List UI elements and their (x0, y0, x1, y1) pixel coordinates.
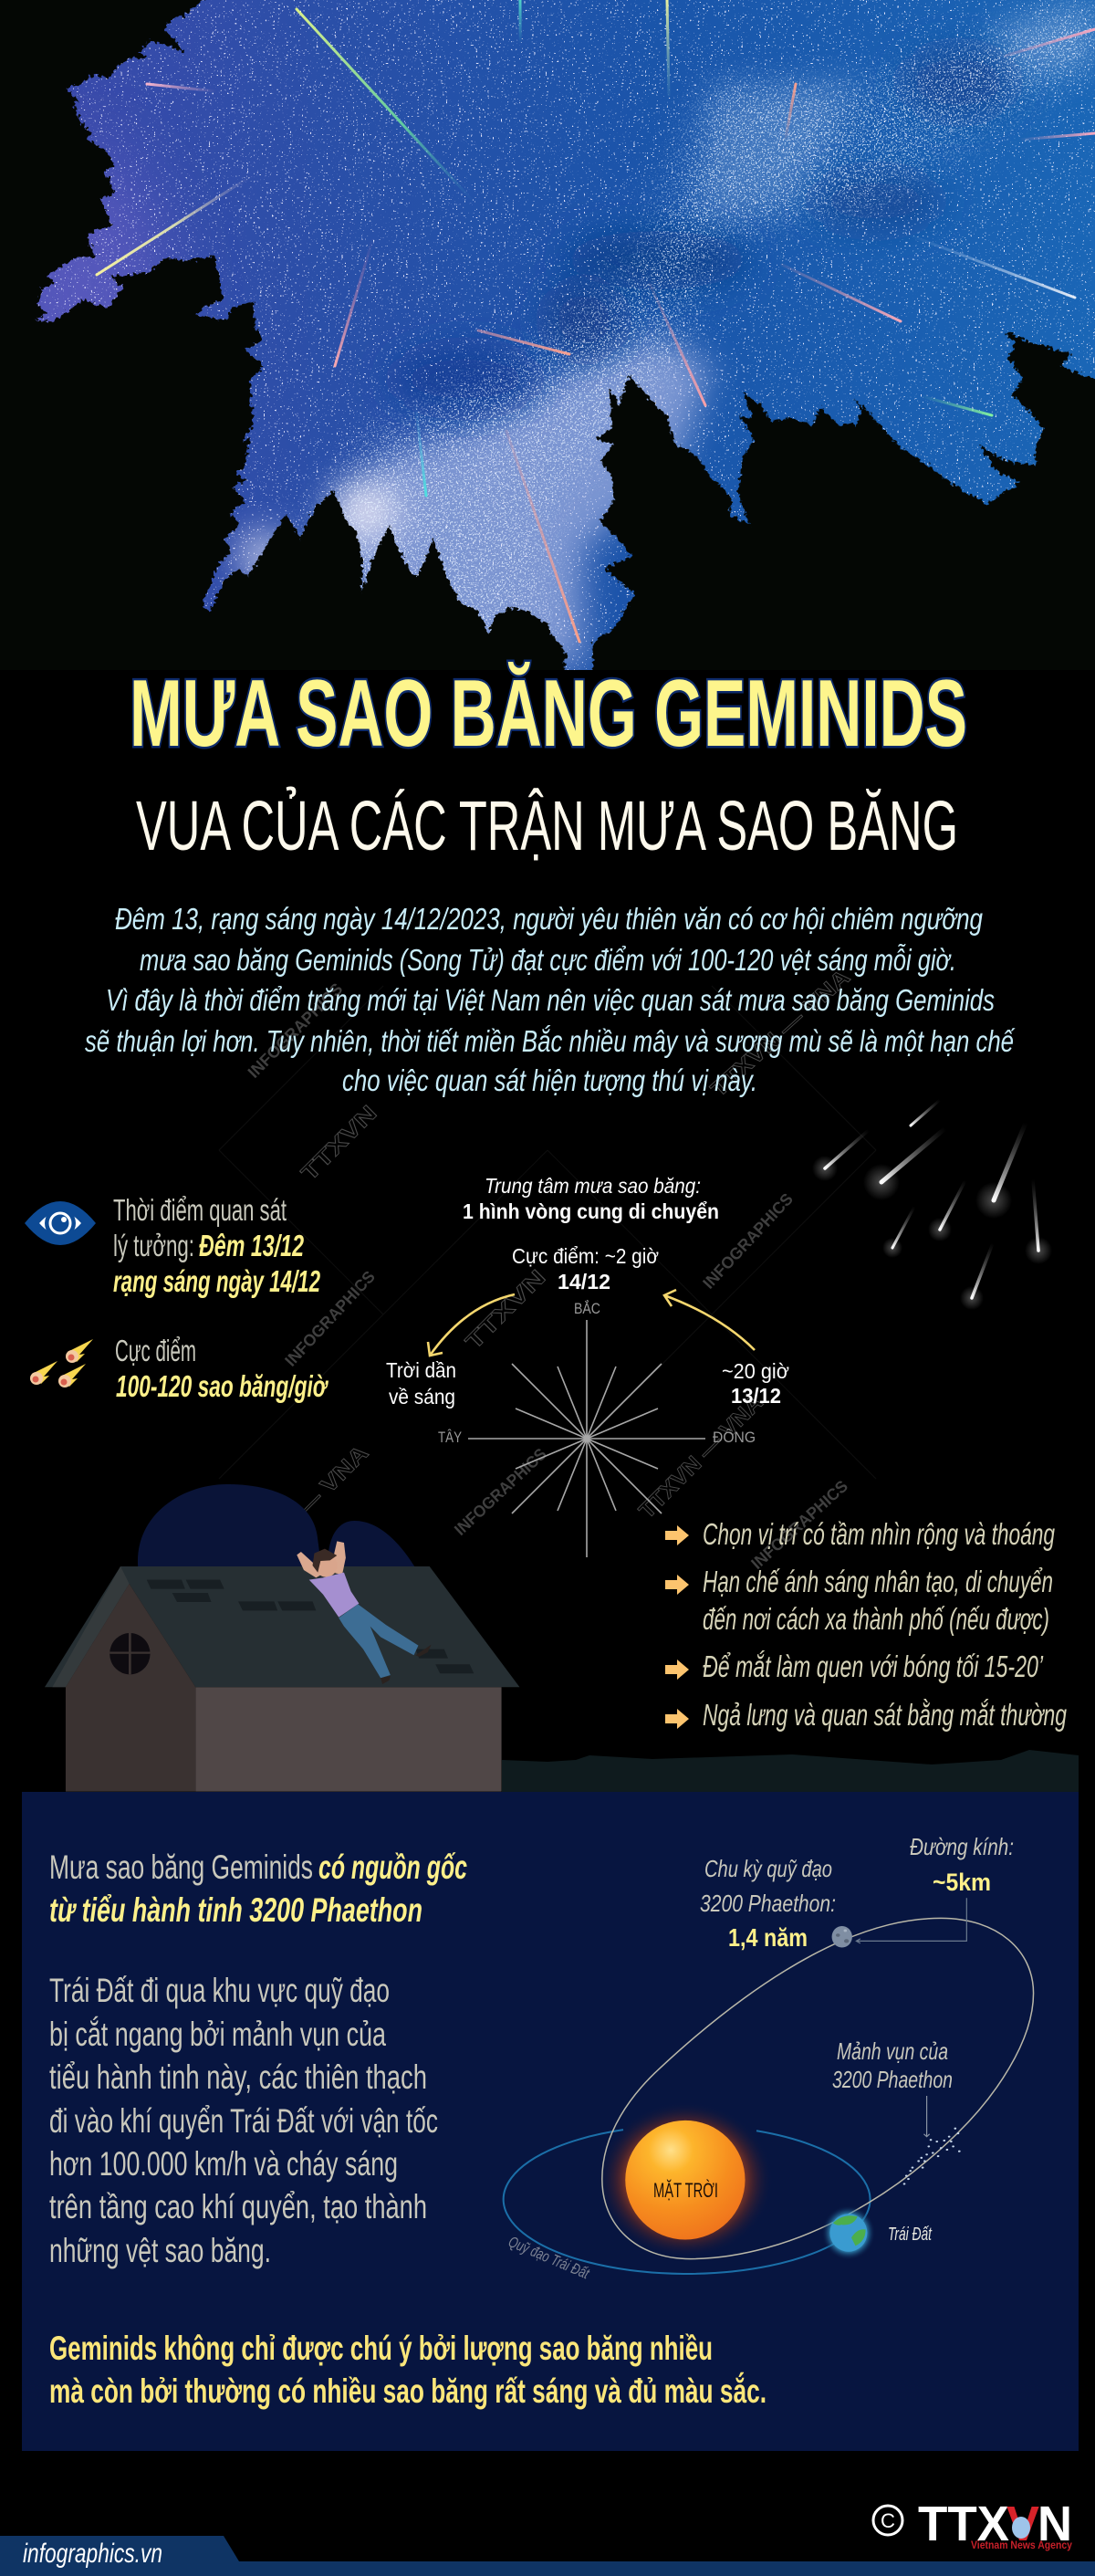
peak rate text (115, 1334, 329, 1403)
origin heading: Mưa sao băng Geminids (49, 1848, 313, 1886)
origin body text: bị cắt ngang bởi mảnh vụn của (49, 2016, 386, 2053)
gable (52, 1566, 130, 1687)
diagram caption: Cực điểm: ~2 giờ (512, 1244, 659, 1268)
origin body text: những vệt sao băng. (49, 2232, 271, 2269)
hero photo: night sky with meteors and pine trees (0, 0, 1095, 697)
closing highlight text (49, 2330, 766, 2410)
star burst compass (468, 1320, 705, 1557)
orbit labels: ~5km (933, 1869, 991, 1896)
orbit labels: Chu kỳ quỹ đạo (704, 1855, 832, 1882)
origin body text: tiểu hành tinh này, các thiên thạch (49, 2058, 427, 2096)
tip bullet arrows (665, 1525, 689, 1729)
watermarks: INFOGRAPHICS (281, 1267, 379, 1370)
closing highlight text: Geminids không chỉ được chú ý bởi lượng sao băng nhiều (49, 2330, 713, 2367)
orbit labels: Trái Đất (888, 2225, 933, 2245)
tips list (665, 1517, 1067, 1732)
radiant diagram (386, 1174, 789, 1557)
watermarks: TTXVN — VNA (224, 1440, 373, 1590)
watermarks: INFOGRAPHICS (747, 1477, 851, 1573)
diagram caption: Trung tâm mưa sao băng: (485, 1174, 701, 1198)
footer site name: infographics.vn (23, 2539, 162, 2569)
watermarks (219, 965, 876, 1590)
person lying on roof (297, 1541, 432, 1684)
peak rate text: 100-120 sao băng/giờ (116, 1369, 329, 1403)
intro paragraph (85, 902, 1016, 1097)
watermarks: INFOGRAPHICS (245, 979, 346, 1082)
orbit labels: 3200 Phaethon: (700, 1890, 836, 1917)
ground band (502, 1750, 1079, 1798)
pine tree silhouettes (0, 0, 1095, 697)
falling meteors decoration (812, 1100, 1052, 1310)
tip text (703, 1517, 1067, 1732)
origin body text (49, 1972, 438, 2269)
orbit labels: 3200 Phaethon (832, 2066, 953, 2093)
logo: TTXVN: C (881, 2509, 895, 2532)
leader: debris (923, 2096, 930, 2137)
logo: TTXVN: N (1038, 2497, 1072, 2551)
phaethon orbit (602, 1918, 1034, 2259)
house illustration with person (45, 1484, 519, 1792)
watermarks: INFOGRAPHICS (699, 1189, 797, 1293)
earth (829, 2214, 867, 2252)
watermarks: TTXVN (297, 1101, 381, 1186)
orbit labels: Quỹ đạo Trái Đất (506, 2233, 592, 2283)
meteor streaks (97, 0, 1095, 642)
orbit labels: Mảnh vụn của (837, 2037, 948, 2065)
watermarks: TTXVN — VNA (706, 965, 855, 1102)
sky (0, 0, 1095, 670)
panel: blue origin panel background (22, 1792, 1079, 2451)
orbit labels: Đường kính: (910, 1833, 1014, 1860)
diagram caption: Trời dần (386, 1358, 456, 1382)
diagram caption: về sáng (389, 1385, 455, 1408)
icon: comets (30, 1339, 93, 1387)
intro paragraph: cho việc quan sát hiện tượng thú vị này. (342, 1063, 757, 1097)
closing highlight text: mà còn bởi thường có nhiều sao băng rất sáng và đủ màu sắc. (49, 2372, 766, 2410)
orbit diagram (504, 1833, 1034, 2283)
diagram caption: 1 hình vòng cung di chuyển (463, 1199, 719, 1223)
origin heading: từ tiểu hành tinh 3200 Phaethon (49, 1891, 422, 1929)
debris field (904, 2129, 959, 2183)
compass labels (438, 1300, 756, 1446)
footer bar (0, 2536, 1095, 2576)
shingles (147, 1580, 474, 1673)
viewing time text (113, 1193, 320, 1298)
diagram caption: 14/12 (558, 1270, 610, 1293)
origin heading (49, 1848, 467, 1929)
watermarks: TTXVN (461, 1265, 550, 1355)
origin body text: hơn 100.000 km/h và cháy sáng (49, 2145, 398, 2183)
walls (195, 1687, 502, 1792)
origin body text: trên tầng cao khí quyển, tạo thành (49, 2188, 427, 2225)
logo: TTXVN (873, 2497, 1072, 2551)
logo: TTXVN: Vietnam News Agency (971, 2539, 1072, 2551)
arrow: peak to dawn (428, 1294, 515, 1356)
sun glow (598, 2101, 773, 2258)
orbit labels: 1,4 năm (728, 1923, 808, 1952)
origin heading: có nguồn gốc (318, 1848, 467, 1886)
logo: TTXVN: TTX (918, 2497, 1009, 2551)
earth orbit (504, 2130, 871, 2274)
origin body text: Trái Đất đi qua khu vực quỹ đạo (49, 1972, 390, 2009)
window (110, 1633, 151, 1674)
viewing time text: rạng sáng ngày 14/12 (113, 1264, 320, 1298)
diagram caption: 13/12 (731, 1384, 781, 1408)
asteroid 3200 Phaethon (832, 1926, 852, 1948)
orbit labels (506, 1833, 1014, 2283)
arrow: evening to peak (664, 1290, 755, 1350)
roof (45, 1566, 519, 1687)
diagram caption (386, 1174, 789, 1408)
origin body text: đi vào khí quyển Trái Đất với vận tốc (49, 2102, 438, 2140)
peak rate text: Cực điểm (115, 1334, 196, 1367)
orbit lines and bodies (504, 1898, 1034, 2274)
diagram caption: ~20 giờ (722, 1359, 789, 1383)
earth glow (821, 2205, 875, 2260)
orbit labels: MẶT TRỜI (653, 2179, 718, 2202)
sun (625, 2120, 745, 2240)
compass labels: BẮC (574, 1300, 600, 1317)
viewing time text: Thời điểm quan sát (113, 1193, 287, 1227)
viewing time text: Đêm 13/12 (199, 1229, 304, 1262)
logo: TTXVN: V (1006, 2497, 1039, 2551)
icon: eye (25, 1201, 96, 1245)
watermarks: INFOGRAPHICS (451, 1445, 550, 1539)
compass labels: TÂY (438, 1429, 462, 1446)
compass labels: ĐÔNG (713, 1429, 756, 1446)
background bushes (138, 1484, 414, 1566)
viewing time text: lý tưởng: (113, 1229, 194, 1262)
watermarks: TTXVN — VNA (634, 1390, 768, 1524)
leader: diameter (856, 1898, 966, 1943)
